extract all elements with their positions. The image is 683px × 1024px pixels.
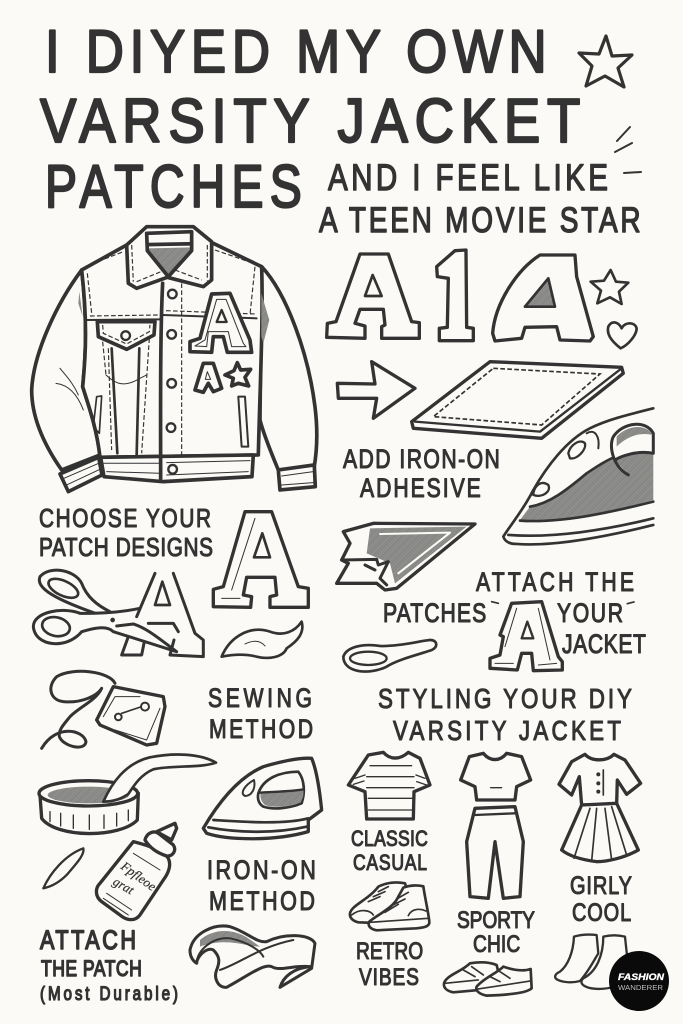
jacket patches [190, 293, 252, 447]
scissors cutting a letter [33, 570, 203, 657]
fabric ribbon [190, 926, 315, 987]
big letter A [213, 512, 308, 607]
heading: styling your diy varsity jacket: VARSITY JACKET [393, 716, 621, 747]
label: classic casual [351, 827, 428, 876]
heading: iron-on method: METHOD [209, 887, 315, 917]
label: sporty chic [457, 906, 535, 958]
logo badge [609, 951, 669, 1011]
label: girly cool: GIRLY [570, 872, 632, 900]
adhesive sheet [412, 362, 623, 438]
heading: attach the patches to your jacket: ATTACH THE [476, 568, 634, 598]
title [40, 18, 580, 220]
jacket illustration [32, 227, 317, 492]
letter cutouts A 1 A [327, 250, 637, 348]
subtitle: AND I FEEL LIKE [328, 158, 608, 199]
heading: choose your patch designs: PATCH DESIGNS [39, 533, 213, 562]
heading: sewing method: METHOD [209, 715, 313, 745]
subtitle [319, 158, 641, 240]
label: classic casual: CLASSIC [351, 827, 428, 852]
heading: sewing method: SEWING [208, 684, 312, 714]
label: sporty chic: CHIC [473, 930, 520, 958]
icon: fabric scrap [222, 622, 302, 658]
heading: iron-on method: IRON-ON [207, 856, 316, 886]
icon: star with sparkles [579, 36, 641, 173]
bottle label: grat [110, 874, 137, 898]
high-top sneakers [350, 882, 429, 930]
icon: heart [608, 322, 637, 348]
label: sporty chic: SPORTY [457, 906, 535, 934]
patch with peeled backing [337, 523, 475, 590]
logo badge: WANDERER [618, 983, 664, 992]
large iron [503, 408, 653, 544]
outfit: striped tee [348, 752, 430, 819]
heading: add iron-on adhesive: ADHESIVE [360, 474, 481, 504]
heading: attach the patch, most durable [40, 926, 178, 1004]
bottle label: Fpfleoe [117, 858, 159, 894]
low sneakers [444, 962, 532, 996]
spoon-shaped scrap [343, 640, 436, 672]
ankle socks [555, 935, 627, 989]
title: PATCHES [45, 153, 302, 220]
label: retro vibes: RETRO [356, 937, 423, 965]
label: retro vibes [356, 937, 423, 991]
heading: choose your patch designs: CHOOSE YOUR [39, 504, 211, 533]
letter A patch [490, 602, 634, 671]
title: VARSITY JACKET [40, 87, 580, 156]
heading: styling your diy varsity jacket [378, 684, 632, 747]
label: retro vibes: VIBES [359, 963, 419, 991]
heading: attach the patches to your jacket: PATCHES [383, 599, 486, 629]
heading: attach the patch, most durable: THE PATCH [41, 957, 142, 982]
heading: sewing method [208, 684, 313, 745]
heading: attach the patches to your jacket: YOUR [557, 599, 623, 629]
thread and sewn patch [42, 671, 165, 748]
outfit: crop top and leggings [461, 753, 531, 898]
glue applicator stick [43, 848, 84, 888]
label: girly cool [570, 872, 632, 927]
heading: choose your patch designs [39, 504, 213, 562]
heading: styling your diy varsity jacket: STYLING YOUR DIY [378, 684, 632, 715]
title: I DIYED MY OWN [45, 18, 547, 85]
heading: attach the patches to your jacket: JACKET [562, 630, 646, 660]
glue bottle [96, 823, 177, 920]
heading: add iron-on adhesive: ADD IRON-ON [343, 445, 500, 475]
logo badge: FASHION [618, 972, 665, 982]
heading: add iron-on adhesive [343, 445, 500, 504]
icon: small star [591, 270, 628, 304]
glue tin with spatula [39, 755, 216, 834]
label: girly cool: COOL [572, 899, 631, 927]
outfit: dress [559, 754, 641, 862]
heading: attach the patch, most durable: ATTACH [40, 926, 136, 956]
subtitle: A TEEN MOVIE STAR [319, 200, 641, 240]
heading: iron-on method [207, 856, 316, 917]
arrow [337, 362, 415, 418]
heading: attach the patch, most durable: (Most Durable) [40, 982, 178, 1004]
small iron [203, 758, 322, 839]
label: classic casual: CASUAL [353, 851, 427, 876]
heading: attach the patches to your jacket [383, 568, 646, 660]
